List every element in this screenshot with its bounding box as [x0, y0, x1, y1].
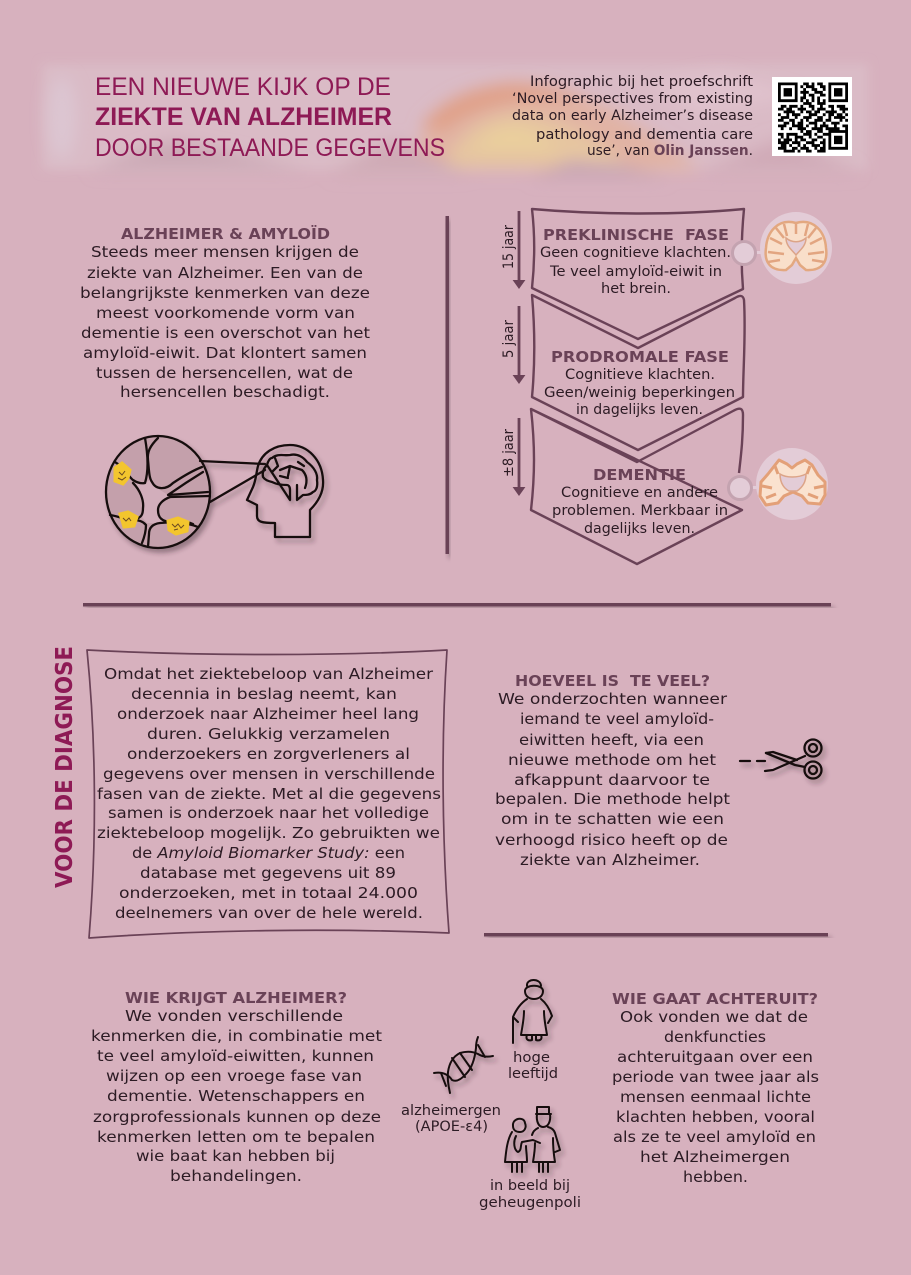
horizontal divider [83, 603, 831, 606]
thesis note: ‘Novel perspectives from existing [512, 91, 753, 107]
phase: preklinisch: Te veel amyloïd-eiwit in [549, 264, 722, 280]
panel: wie gaat achteruit: klachten hebben, vooral [616, 1108, 815, 1126]
phase: preklinisch: Geen cognitieve klachten. [540, 245, 731, 261]
timeline arrows: 15 jaar [501, 225, 517, 269]
panel: hoeveel is te veel: We onderzochten wanneer [498, 690, 728, 708]
panel: wie gaat achteruit: als ze te veel amyloïd en [613, 1128, 816, 1146]
title: EEN NIEUWE KIJK OP DE [95, 73, 391, 101]
panel: hoeveel is te veel: nieuwe methode om het [508, 751, 716, 769]
label: alzheimergen: alzheimergen [401, 1103, 501, 1119]
section label: VOOR DE DIAGNOSE [52, 646, 78, 888]
header banner artwork [42, 64, 868, 178]
panel: Alzheimer en amyloid: ALZHEIMER & AMYLOÏD [121, 224, 330, 243]
phase: prodromaal: Cognitieve klachten. [565, 367, 715, 383]
panel: onderzoek frame: fasen van de ziekte. Met al die gegevens [97, 785, 441, 803]
thesis note: data on early Alzheimer’s disease [512, 108, 753, 124]
panel: wie krijgt alzheimer: zorgprofessionals kunnen op deze [93, 1108, 381, 1126]
panel: wie gaat achteruit: Ook vonden we dat de [620, 1008, 808, 1026]
phase: dementie [552, 466, 728, 537]
panel: hoeveel is te veel: HOEVEEL IS TE VEEL? [515, 672, 710, 690]
icon: healthy brain section [732, 212, 832, 284]
panel: wie gaat achteruit: periode van twee jaar als [612, 1068, 819, 1086]
label: geheugenpoli: in beeld bij [490, 1178, 570, 1194]
panel: onderzoek frame: onderzoeken, met in totaal 24.000 [119, 884, 418, 902]
icon: neuron magnified with amyloid plaques [106, 436, 265, 548]
thesis note [512, 74, 753, 159]
timeline arrows: 5 jaar [501, 320, 517, 358]
phase: dementie: dagelijks leven. [584, 521, 695, 537]
panel: Alzheimer en amyloid: Steeds meer mensen krijgen de [91, 243, 359, 261]
panel: wie krijgt alzheimer [91, 989, 382, 1185]
phase: preklinisch: het brein. [601, 281, 671, 297]
panel: onderzoek frame: onderzoek naar Alzheimer heel lang [117, 705, 419, 723]
label: geheugenpoli: geheugenpoli [479, 1195, 581, 1211]
panel: wie krijgt alzheimer: kenmerken die, in combinatie met [91, 1027, 382, 1045]
phase: prodromaal: Geen/weinig beperkingen [544, 385, 735, 401]
phase: prodromaal [544, 348, 735, 418]
panel: wie gaat achteruit [612, 990, 819, 1186]
panel: wie krijgt alzheimer: wie baat kan hebben bij [136, 1147, 335, 1165]
panel: wie gaat achteruit: mensen eenmaal lichte [620, 1088, 811, 1106]
panel: onderzoek frame: decennia in beslag neemt, kan [131, 685, 397, 703]
panel: hoeveel is te veel: verhoogd risico heeft op de [495, 831, 728, 849]
panel: onderzoek frame: duren. Gelukkig verzamelen [147, 725, 390, 743]
timeline arrows: ±8 jaar [501, 429, 517, 477]
panel: Alzheimer en amyloid: belangrijkste kenmerken van deze [80, 284, 370, 302]
panel: hoeveel is te veel [495, 672, 730, 869]
label: hoge leeftijd [508, 1050, 558, 1082]
panel: Alzheimer en amyloid: ziekte van Alzheimer. Een van de [87, 264, 363, 282]
timeline arrows [501, 211, 525, 496]
panel: wie krijgt alzheimer: dementie. Wetenschappers en [107, 1087, 365, 1105]
thesis note: use’, van Olin Janssen. [587, 143, 753, 159]
phase: preklinisch: PREKLINISCHE FASE [543, 226, 729, 244]
panel: Alzheimer en amyloid: amyloïd-eiwit. Dat klontert samen [83, 344, 367, 362]
title [95, 73, 445, 162]
phase: prodromaal: in dagelijks leven. [576, 402, 703, 418]
title: DOOR BESTAANDE GEGEVENS [95, 134, 445, 162]
label: alzheimergen: (APOE-ε4) [415, 1119, 488, 1135]
phase: prodromaal: PRODROMALE FASE [551, 348, 729, 366]
panel: onderzoek frame: database met gegevens uit 89 [140, 864, 396, 882]
panel: hoeveel is te veel: om in te schatten wie een [501, 810, 724, 828]
panel: wie gaat achteruit: achteruitgaan over een [617, 1048, 813, 1066]
phase frames [531, 209, 745, 564]
vertical divider [446, 216, 449, 554]
panel: hoeveel is te veel: eiwitten heeft, via een [519, 731, 704, 749]
panel: hoeveel is te veel: bepalen. Die methode helpt [495, 790, 730, 808]
phase: preklinisch [540, 226, 731, 297]
panel: onderzoek frame: samen is onderzoek naar het volledige [108, 804, 429, 822]
panel: wie krijgt alzheimer: behandelingen. [170, 1167, 302, 1185]
panel: Alzheimer en amyloid: tussen de hersencellen, wat de [96, 364, 353, 382]
panel: hoeveel is te veel: iemand te veel amyloïd- [520, 710, 714, 728]
panel: onderzoek frame [87, 650, 449, 938]
phase: dementie: Cognitieve en andere [561, 485, 718, 501]
panel: hoeveel is te veel: ziekte van Alzheimer. [520, 851, 700, 869]
icon: DNA helix [434, 1037, 493, 1093]
label: alzheimergen [401, 1103, 501, 1135]
icon: older woman [513, 980, 552, 1043]
icon: scissors [740, 740, 822, 778]
panel: onderzoek frame: ziektebeloop mogelijk. Zo gebruikten we [97, 824, 440, 842]
panel: Alzheimer en amyloid: dementie is een overschot van het [81, 324, 370, 342]
icon: head with brain [247, 445, 323, 537]
panel: onderzoek frame: onderzoekers en zorgverleners al [127, 745, 410, 763]
phase: dementie: DEMENTIE [593, 466, 686, 484]
panel: wie gaat achteruit: WIE GAAT ACHTERUIT? [612, 990, 818, 1008]
thesis note: pathology and dementia care [536, 127, 753, 143]
panel: Alzheimer en amyloid: hersencellen beschadigt. [120, 383, 330, 401]
panel: wie gaat achteruit: het Alzheimergen [640, 1148, 790, 1166]
label: geheugenpoli [479, 1178, 581, 1211]
panel: wie gaat achteruit: hebben. [683, 1168, 748, 1186]
panel: wie krijgt alzheimer: WIE KRIJGT ALZHEIMER? [125, 989, 347, 1007]
panel: wie krijgt alzheimer: kenmerken letten om te bepalen [97, 1128, 375, 1146]
panel: onderzoek frame: deelnemers van over de hele wereld. [115, 904, 423, 922]
panel: onderzoek frame: de Amyloid Biomarker Study: een [132, 844, 405, 862]
panel: wie krijgt alzheimer: wijzen op een vroege fase van [106, 1067, 362, 1085]
panel: onderzoek frame: Omdat het ziektebeloop van Alzheimer [104, 665, 434, 683]
horizontal divider right [484, 933, 828, 936]
label: hoge leeftijd: leeftijd [508, 1066, 558, 1082]
phase: dementie: problemen. Merkbaar in [552, 503, 728, 519]
label: hoge leeftijd: hoge [513, 1050, 550, 1066]
thesis note: Infographic bij het proefschrift [530, 74, 753, 90]
icon: atrophied brain section [728, 448, 828, 520]
panel: onderzoek frame: gegevens over mensen in verschillende [103, 765, 435, 783]
panel: wie krijgt alzheimer: te veel amyloïd-eiwitten, kunnen [97, 1047, 374, 1065]
icon: patient and nurse [505, 1107, 560, 1172]
panel: wie gaat achteruit: denkfuncties [664, 1028, 766, 1046]
panel: Alzheimer en amyloid: meest voorkomende vorm van [96, 304, 355, 322]
panel: wie krijgt alzheimer: We vonden verschillende [125, 1007, 343, 1025]
panel: Alzheimer en amyloid [80, 224, 370, 401]
QR code [772, 77, 852, 156]
panel: hoeveel is te veel: afkappunt daarvoor te [514, 771, 710, 789]
title: ZIEKTE VAN ALZHEIMER [95, 103, 392, 131]
